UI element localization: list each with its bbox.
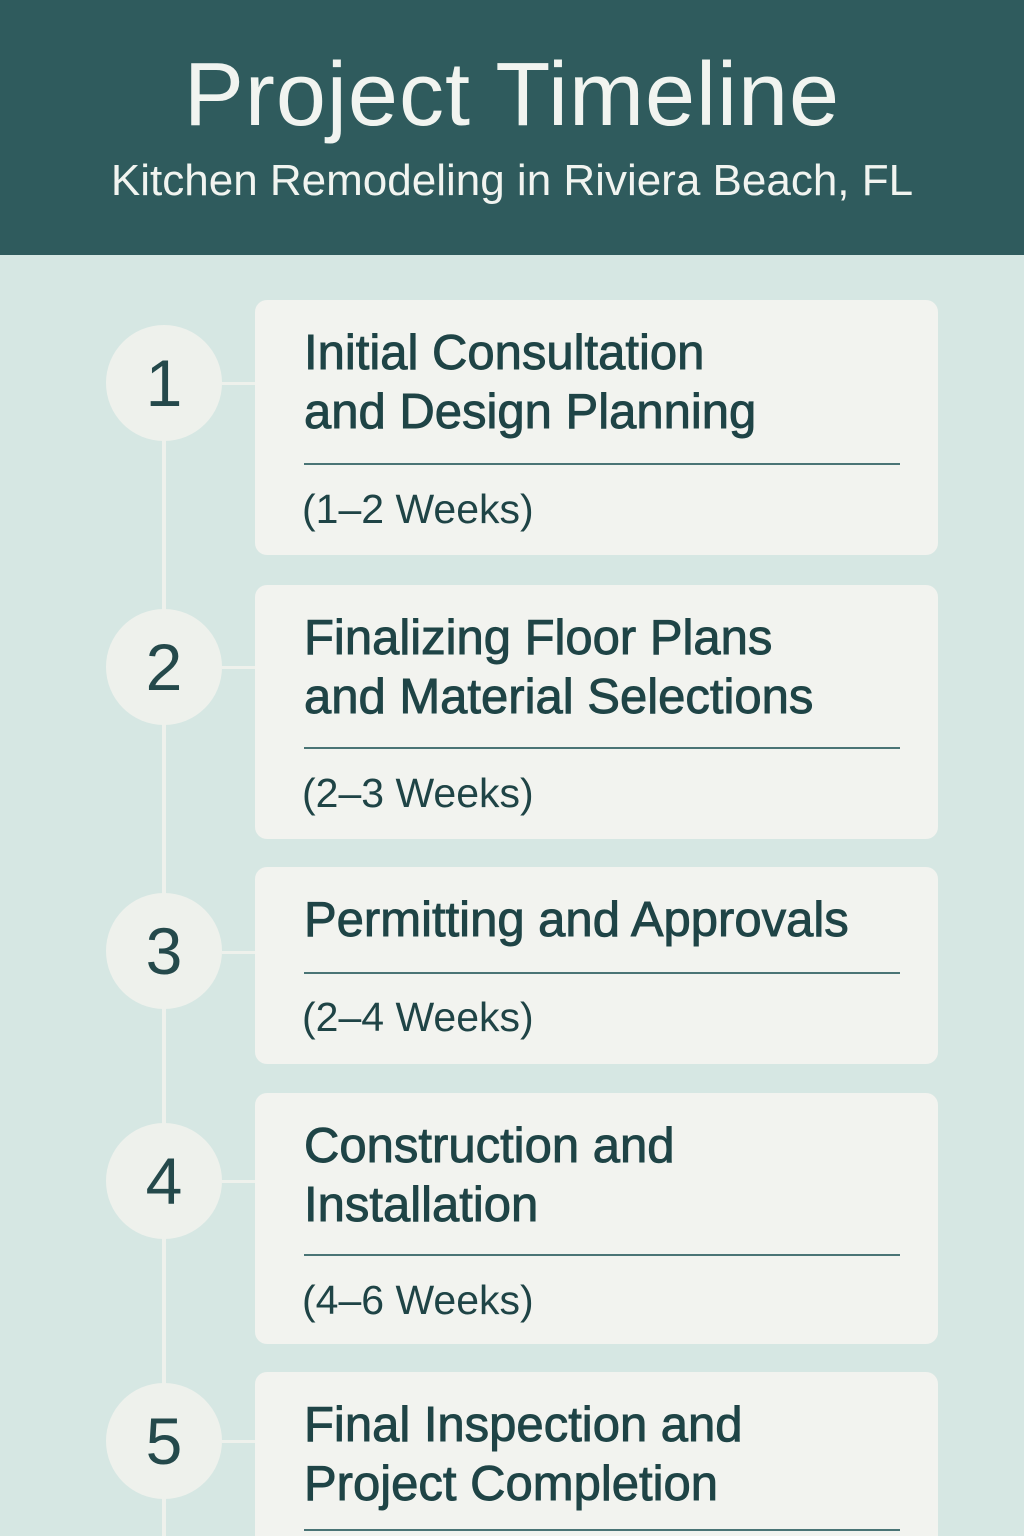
subtitle: Kitchen Remodeling in Riviera Beach, FL [111,156,913,205]
step 2 circle: 2 [146,630,182,704]
card 2 [255,585,938,839]
step 1 circle [106,325,222,441]
card 2: and Material Selections [304,670,813,724]
duration 3: (2–4 Weeks) [302,994,534,1040]
card 4: Installation [304,1178,538,1232]
card 4 [255,1093,938,1344]
step 1 circle: 1 [146,346,182,420]
card 5 [255,1372,938,1536]
step 2 circle [106,609,222,725]
card 1: and Design Planning [304,385,756,439]
card 5: Final Inspection and [304,1398,743,1452]
step 4 circle: 4 [146,1144,182,1218]
card 4: Construction and [304,1119,674,1173]
card 1 [255,300,938,555]
card 1: Initial Consultation [304,326,704,380]
step 4 circle [106,1123,222,1239]
step 3 circle: 3 [146,914,182,988]
duration 4: (4–6 Weeks) [302,1277,534,1323]
duration 1: (1–2 Weeks) [302,486,534,532]
timeline line [162,400,166,1536]
header [0,0,1024,255]
duration 2: (2–3 Weeks) [302,770,534,816]
card 3: Permitting and Approvals [304,893,849,947]
step 3 circle [106,893,222,1009]
card 2: Finalizing Floor Plans [304,611,772,665]
card 3 [255,867,938,1064]
step 5 circle [106,1383,222,1499]
title: Project Timeline [184,45,840,145]
step 5 circle: 5 [146,1404,182,1478]
card 5: Project Completion [304,1457,718,1511]
